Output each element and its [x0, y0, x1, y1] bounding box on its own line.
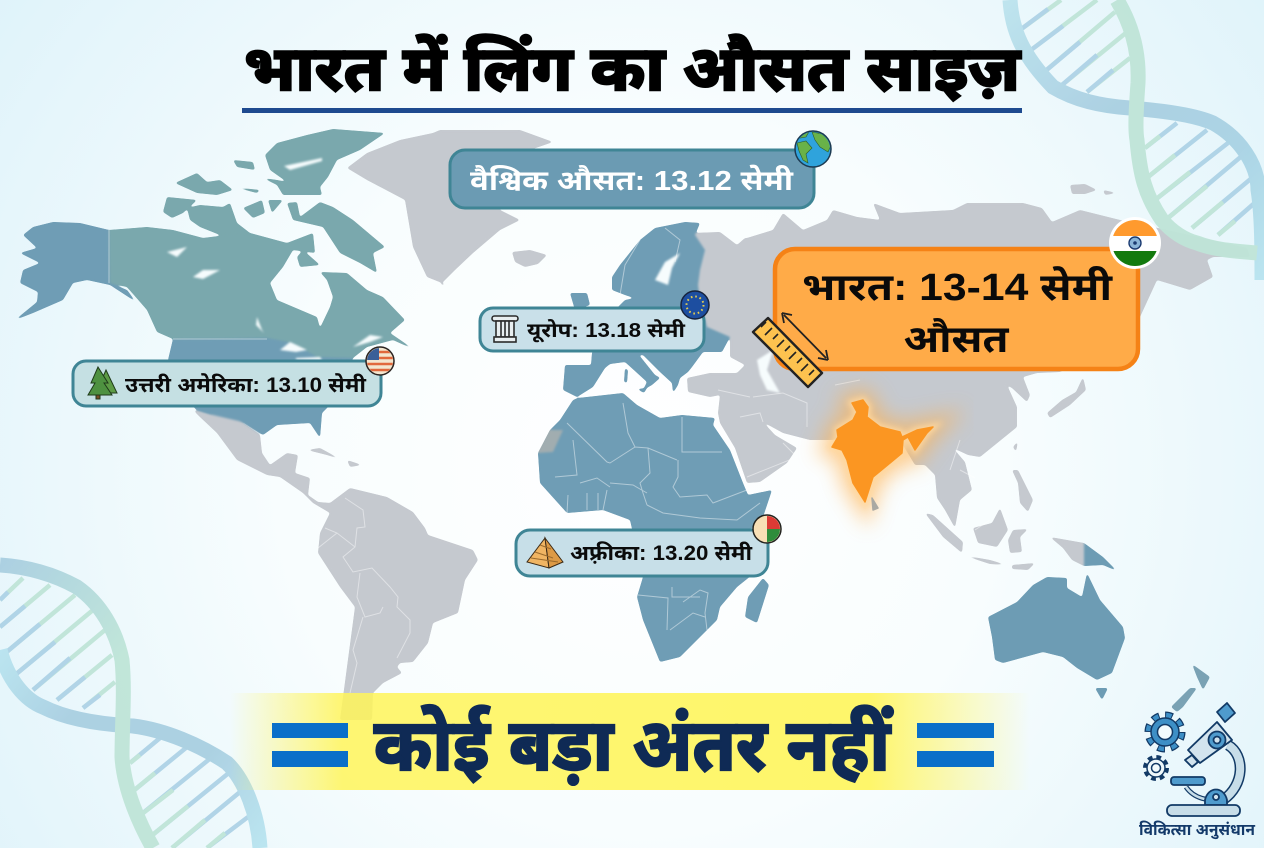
map: Western Sahara	[538, 430, 563, 453]
icon: microscope	[1167, 703, 1240, 816]
world map	[15, 129, 1250, 720]
icon: large gear	[1148, 715, 1182, 749]
logo: medical research	[1139, 703, 1256, 840]
callout: global average	[450, 130, 832, 208]
title: भारत में लिंग का औसत साइज़	[244, 34, 1021, 104]
DNA helix top right	[1010, 0, 1262, 280]
conclusion band: कोई बड़ा अंतर नहीं	[374, 705, 894, 786]
map: Iceland	[512, 250, 547, 267]
callout: North America: उत्तरी अमेरिका: 13.10 सेमी	[125, 373, 367, 397]
map: Alaska	[15, 222, 147, 320]
map: Africa	[538, 393, 772, 662]
icon: ruler	[753, 318, 822, 387]
map: Baltic sea	[655, 253, 680, 285]
icon: measure arrow	[782, 313, 828, 360]
callout: India: भारत: 13-14 सेमी	[802, 265, 1113, 309]
icon: Indian flag	[1109, 217, 1161, 269]
icon: pine trees	[88, 367, 117, 399]
map: Australia	[988, 573, 1125, 700]
callout: North America	[73, 347, 394, 406]
map: Caspian sea	[757, 350, 780, 393]
icon: Madagascar flag	[753, 515, 781, 543]
icon: globe	[795, 130, 832, 167]
icon: small gear	[1146, 758, 1166, 778]
map: Japan and east Asia islands	[1013, 184, 1117, 452]
callout: India	[753, 217, 1161, 387]
icon: column	[492, 316, 518, 342]
icon: left equals bars	[272, 723, 348, 767]
map: New Zealand	[1171, 664, 1210, 712]
callout: Africa	[516, 515, 781, 576]
callout: Africa: अफ़्रीका: 13.20 सेमी	[570, 541, 753, 565]
map: Madagascar	[745, 578, 769, 623]
land masses	[15, 129, 1250, 720]
logo caption: विकित्सा अनुसंधान	[1139, 821, 1256, 840]
map: USA	[168, 338, 353, 438]
map: Caribbean islands	[307, 448, 362, 467]
DNA helix bottom left	[0, 565, 260, 848]
icon: US flag	[366, 347, 394, 375]
map: Papua New Guinea	[1084, 543, 1117, 571]
map: Eurasia grey	[687, 203, 1250, 528]
conclusion band	[230, 693, 1030, 790]
map: Greenland	[347, 130, 553, 285]
map: Canadian lakes and gulf	[167, 158, 383, 360]
map: Canada mainland	[109, 227, 415, 358]
callout: India: औसत	[904, 317, 1010, 361]
icon: right equals bars	[917, 723, 994, 767]
map: Europe	[563, 222, 730, 397]
map: Central and South America	[193, 410, 478, 720]
India highlighted	[832, 400, 933, 510]
callout: Europe	[480, 291, 709, 351]
map: Canadian arctic islands	[163, 129, 385, 273]
callout: global average: वैश्विक औसत: 13.12 सेमी	[470, 163, 794, 196]
icon: pyramid	[527, 538, 563, 568]
title underline	[242, 108, 1022, 113]
icon: EU flag	[681, 291, 709, 319]
map: country borders	[109, 228, 990, 693]
map: Southeast Asia islands	[925, 470, 1084, 570]
callout: Europe: यूरोप: 13.18 सेमी	[527, 318, 686, 343]
